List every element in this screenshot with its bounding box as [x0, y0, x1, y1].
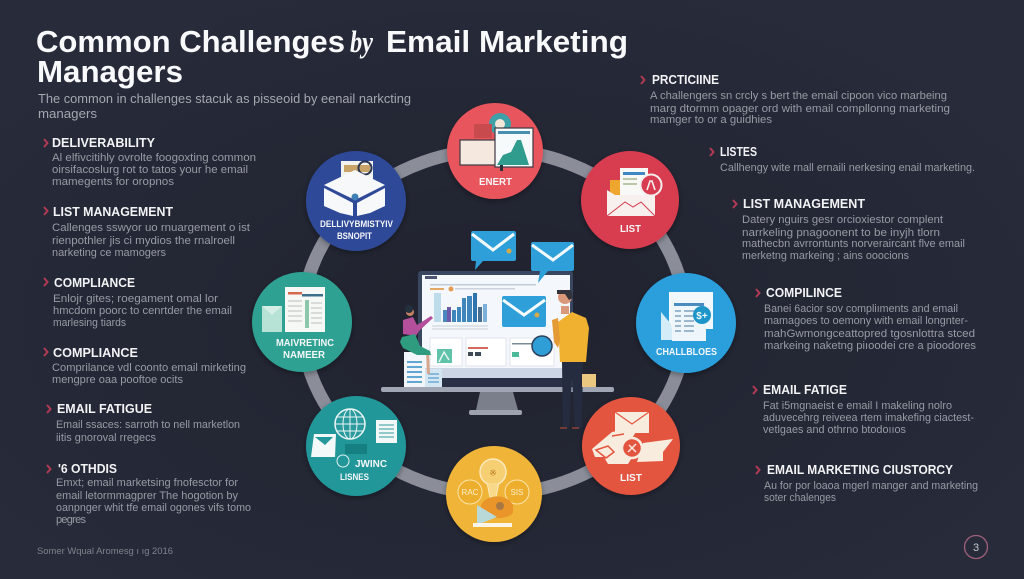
circle: yellow, ideas: ※: [489, 468, 497, 478]
item: email fatige: [753, 383, 974, 436]
woman on documents: [400, 305, 433, 374]
item: compilince: mahGwmongceattopred tgosnlottra stced: [764, 328, 975, 340]
item: compliance one: hmcdom poorc to cenrtder the email: [53, 305, 232, 317]
title: by: [350, 24, 373, 59]
circle: navy, deliverability: DELLIVYBMISTYIV: [320, 219, 393, 229]
bar chart on screen: [432, 293, 488, 329]
item: compliance one: COMPLIANCE: [54, 276, 135, 290]
item: others: '6 OTHDIS: [58, 462, 117, 476]
central illustration: monitor and people: [381, 231, 614, 428]
item: list management: LIST MANAGEMENT: [743, 197, 865, 211]
item: deliverability: DELIVERABILITY: [52, 136, 156, 150]
item: practicine: [641, 73, 950, 126]
circle: blue, challenges: CHALLBLOES: [656, 347, 717, 358]
icon: speech bubble envelope two: [531, 242, 574, 283]
circle: lower teal, jwinc lisnes: [306, 396, 406, 496]
item: others: Emxt; email marketsing fnofesctor for: [56, 477, 238, 489]
item: others: email letormmagprer The hogotion by: [56, 490, 238, 502]
item: practicine: A challengers sn crcly s bert the email cipoon vico marbeing: [650, 90, 947, 102]
title: Managers: [37, 54, 183, 89]
item: compilince: mamagoes to oemony with email longnter-: [764, 315, 968, 327]
monitor: [418, 271, 573, 387]
item: listes: Callhengy wite rnall ernaili nerkesing enail marketing.: [720, 162, 975, 174]
circle: top red, enert: [447, 103, 543, 199]
circle: teal, marketing manager: NAMEER: [283, 350, 326, 361]
item: compilince: COMPILINCE: [766, 286, 842, 300]
item: compliance two: mengpre oaa pooftoe ocits: [52, 374, 183, 386]
icon: envelope on screen: [502, 296, 546, 327]
item: list management: narrkeling pnagoonent to be inyjh tlorn: [742, 227, 940, 239]
subtitle: The common in challenges stacuk as pisseoid by eenail narkcting: [38, 91, 411, 106]
item: listes: LISTES: [720, 145, 757, 159]
circle: teal, marketing manager: [252, 272, 352, 372]
ring connecting the challenge circles: [302, 150, 686, 494]
item: listes: [710, 145, 975, 174]
circle: lower teal, jwinc lisnes: JWINC: [355, 459, 387, 470]
item: practicine: PRCTICIINE: [652, 73, 719, 87]
document stacks on desk: [404, 352, 442, 387]
item: email fatige: aduvecehrg reiveea rtem imakefing ciactest-: [763, 412, 974, 424]
page number badge: [964, 536, 988, 558]
circle: yellow, ideas: [446, 446, 542, 542]
item: deliverability: [44, 136, 256, 188]
item: list management: mathecbn avrrontunts norveraircant flve email: [742, 238, 965, 250]
item: list management: [44, 205, 250, 259]
item: compliance two: COMPLIANCE: [53, 346, 138, 360]
circle: teal, marketing manager: MAIVRETINC: [276, 338, 334, 349]
circle: blue, challenges: [636, 273, 736, 373]
item: email fatigue: EMAIL FATIGUE: [57, 402, 152, 416]
circle: yellow, ideas: SIS: [511, 488, 523, 497]
circle: crimson, list: [581, 151, 679, 249]
dashboard cards on screen: [430, 338, 554, 366]
item: others: [47, 462, 251, 526]
item: list management: Datery nguirs gesr orcioxiestor complent: [742, 214, 943, 226]
man in yellow sweater: [532, 290, 596, 428]
item: email marketing history: soter chalenges: [764, 492, 836, 504]
circle: crimson, list: LIST: [620, 224, 641, 235]
circle: yellow, ideas: RAC: [462, 488, 479, 497]
item: compilince: Banei 6acior sov compliıments and email: [764, 303, 958, 315]
item: list management: narketing ce mamogers: [52, 247, 166, 259]
circle: lower teal, jwinc lisnes: LISNES: [340, 472, 369, 482]
item: list management: rienpothler jis ci mydios the rnalroell: [52, 235, 235, 247]
desk shelf and stand: [381, 387, 614, 415]
circle: navy, deliverability: BSNOPIT: [337, 231, 372, 241]
title: Common Challenges: [36, 24, 345, 59]
item: list management: [733, 197, 965, 262]
item: email fatigue: Email ssaces: sarroth to nell marketlon: [56, 419, 240, 431]
item: compliance two: [44, 346, 246, 386]
item: email marketing history: [756, 463, 978, 504]
source footer: Somer Wqual Aromesg ı ıg 2016: [37, 546, 173, 557]
item: others: oanpnger whit tfe email ogones vifs tomo: [56, 502, 251, 514]
page number badge: 3: [973, 542, 979, 554]
title: Email Marketing: [386, 24, 628, 59]
circle: orange red, list: [582, 397, 680, 495]
item: practicine: marg dtormm opager ord with email compllonng marketing: [650, 103, 950, 115]
item: email fatige: vetlgaes and othrno btodoııos: [763, 424, 906, 436]
circle: navy, deliverability: [306, 151, 406, 251]
subtitle: managers: [38, 106, 98, 121]
circle: blue, challenges: $+: [696, 311, 708, 322]
item: list management: merketng markeing ; ains ooocions: [742, 250, 909, 262]
item: compilince: markeing naketng piıoodei cre a pioodores: [764, 340, 976, 352]
item: list management: LIST MANAGEMENT: [53, 205, 173, 219]
left column of challenges: [44, 136, 256, 526]
right column of challenges: [641, 73, 978, 504]
item: compilince: [756, 286, 976, 352]
item: email fatigue: iitis gnoroval rregecs: [56, 432, 156, 444]
item: email fatigue: [47, 402, 240, 444]
item: list management: Callenges sswyor uo rnuargement o ist: [52, 222, 250, 234]
item: compliance one: [44, 276, 232, 329]
item: compliance one: Enlojr gites; roegament omal lor: [53, 293, 218, 305]
item: deliverability: oirsifacoslurg rot to tatos your he email: [52, 164, 248, 176]
icon: speech bubble envelope one: [471, 231, 516, 270]
item: email marketing history: Au for por loaoa mgerl manger and marketing: [764, 480, 978, 492]
circle: top red, enert: ENERT: [479, 177, 512, 188]
item: practicine: mamger to or a guidhies: [650, 114, 773, 126]
item: email marketing history: EMAIL MARKETING CIUSTORCY: [767, 463, 954, 477]
item: deliverability: Al elfivcitihly ovrolte foogoxting common: [52, 152, 256, 164]
item: email fatige: EMAIL FATIGE: [763, 383, 847, 397]
item: email fatige: Fat i5mgnaeist e email I makeling nolro: [763, 400, 952, 412]
item: deliverability: mamegents for oropnos: [52, 176, 175, 188]
item: compliance two: Comprilance vdl coonto email mirketing: [52, 362, 246, 374]
subtitle: [38, 91, 411, 121]
circle: orange red, list: LIST: [620, 473, 642, 484]
item: others: pegres: [56, 514, 86, 526]
title: [36, 24, 628, 89]
item: compliance one: marlesing tiards: [53, 317, 126, 329]
